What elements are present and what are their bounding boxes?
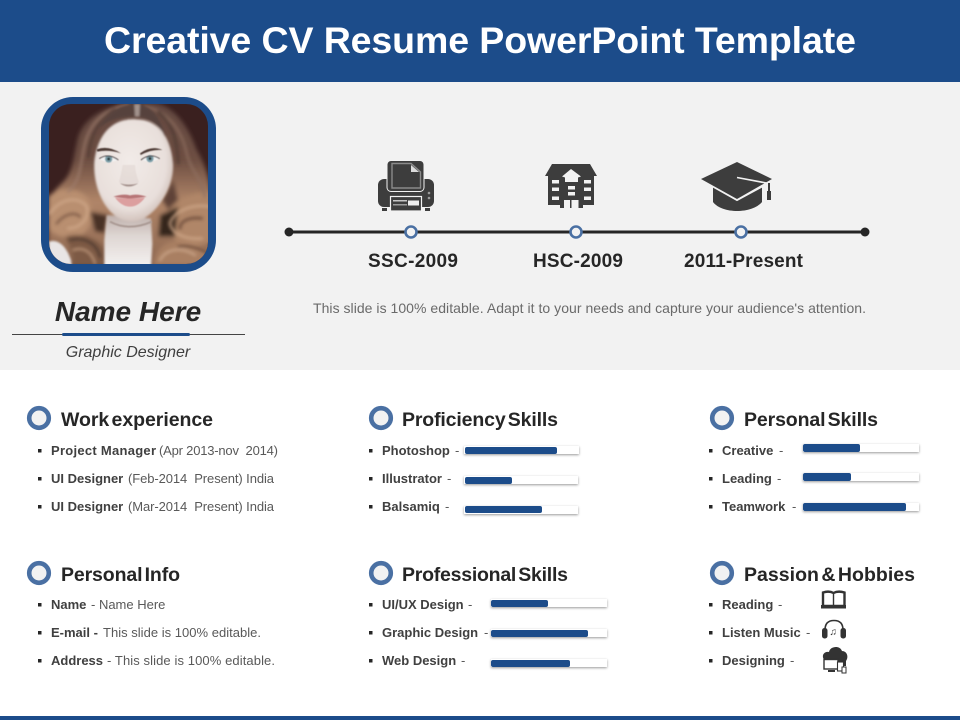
panel: work experience xyxy=(29,408,278,514)
panel: professional skills: - xyxy=(484,625,488,640)
panel: proficiency skills: Proficiency Skills xyxy=(402,409,558,431)
panel: personal info: - Name Here xyxy=(91,597,165,612)
panel: proficiency skills: - xyxy=(447,471,451,486)
panel: work experience: (Feb-2014 Present) India xyxy=(128,471,275,486)
name: Name Here xyxy=(55,296,201,327)
panel: professional skills: Graphic Design xyxy=(382,625,478,640)
panel: personal info xyxy=(29,563,275,668)
name divider xyxy=(12,333,245,336)
panel: personal skills: - xyxy=(792,499,796,514)
timeline xyxy=(284,226,870,238)
panel: personal skills: - xyxy=(777,471,781,486)
panel: personal skills xyxy=(709,408,919,514)
profile photo frame xyxy=(41,97,216,272)
icon: cloud devices xyxy=(823,647,847,673)
panel: proficiency skills: Illustrator xyxy=(382,471,442,486)
role: Graphic Designer xyxy=(66,344,191,361)
panel: professional skills: Web Design xyxy=(382,653,456,668)
panel: passion and hobbies: Listen Music xyxy=(722,625,801,640)
icon: graduation cap xyxy=(701,162,772,211)
panel: professional skills xyxy=(369,563,607,668)
timeline label: SSC: SSC-2009 xyxy=(368,251,458,272)
panel: personal info: - This slide is 100% editable. xyxy=(107,653,275,668)
icon: printer xyxy=(378,160,434,211)
panel: proficiency skills: Photoshop xyxy=(382,443,450,458)
panel: personal info: Name xyxy=(51,597,86,612)
panel: work experience: (Apr 2013-nov 2014) xyxy=(159,443,278,458)
timeline label: present: 2011-Present xyxy=(684,251,804,272)
icon: school building xyxy=(545,164,597,208)
panel: personal info: E-mail - xyxy=(51,625,98,640)
panel: passion and hobbies: Passion & Hobbies xyxy=(744,564,915,586)
panel: passion and hobbies: - xyxy=(790,653,794,668)
panel: professional skills: - xyxy=(468,597,472,612)
panel: proficiency skills: - xyxy=(455,443,459,458)
description: This slide is 100% editable. Adapt it to your needs and capture your audience's attention. xyxy=(313,300,866,316)
panel: personal skills: Personal Skills xyxy=(744,409,878,431)
panel: work experience: UI Designer xyxy=(51,471,123,486)
panel: personal info: Address xyxy=(51,653,103,668)
timeline label: HSC: HSC-2009 xyxy=(533,251,623,272)
panel: passion and hobbies xyxy=(709,563,915,673)
header band xyxy=(0,0,960,82)
panel: personal skills: Teamwork xyxy=(722,499,786,514)
panel: work experience: (Mar-2014 Present) India xyxy=(128,499,275,514)
panel: passion and hobbies: Reading xyxy=(722,597,773,612)
panel: personal info: Personal Info xyxy=(61,564,180,586)
panel: work experience: Work experience xyxy=(61,409,213,431)
panel: passion and hobbies: Designing xyxy=(722,653,785,668)
icon: headphones: ♫ xyxy=(830,627,837,638)
panel: personal skills: Creative xyxy=(722,443,773,458)
bottom band xyxy=(0,716,960,720)
icon: headphones xyxy=(822,620,846,638)
panel: work experience: Project Manager xyxy=(51,443,156,458)
panel: proficiency skills xyxy=(369,408,579,514)
panel: personal skills: - xyxy=(779,443,783,458)
panel: proficiency skills: - xyxy=(445,499,449,514)
panel: proficiency skills: Balsamiq xyxy=(382,499,440,514)
panel: professional skills: - xyxy=(461,653,465,668)
panel: passion and hobbies: - xyxy=(806,625,810,640)
panel: professional skills: Professional Skills xyxy=(402,564,568,586)
title: Creative CV Resume PowerPoint Template xyxy=(104,19,856,61)
icon: book xyxy=(821,592,846,608)
panel: profile and education xyxy=(0,82,960,370)
panel: work experience: UI Designer xyxy=(51,499,123,514)
panel: personal info: This slide is 100% editable. xyxy=(103,625,261,640)
panel: personal skills: Leading xyxy=(722,471,772,486)
panel: passion and hobbies: - xyxy=(778,597,782,612)
panel: professional skills: UI/UX Design xyxy=(382,597,464,612)
